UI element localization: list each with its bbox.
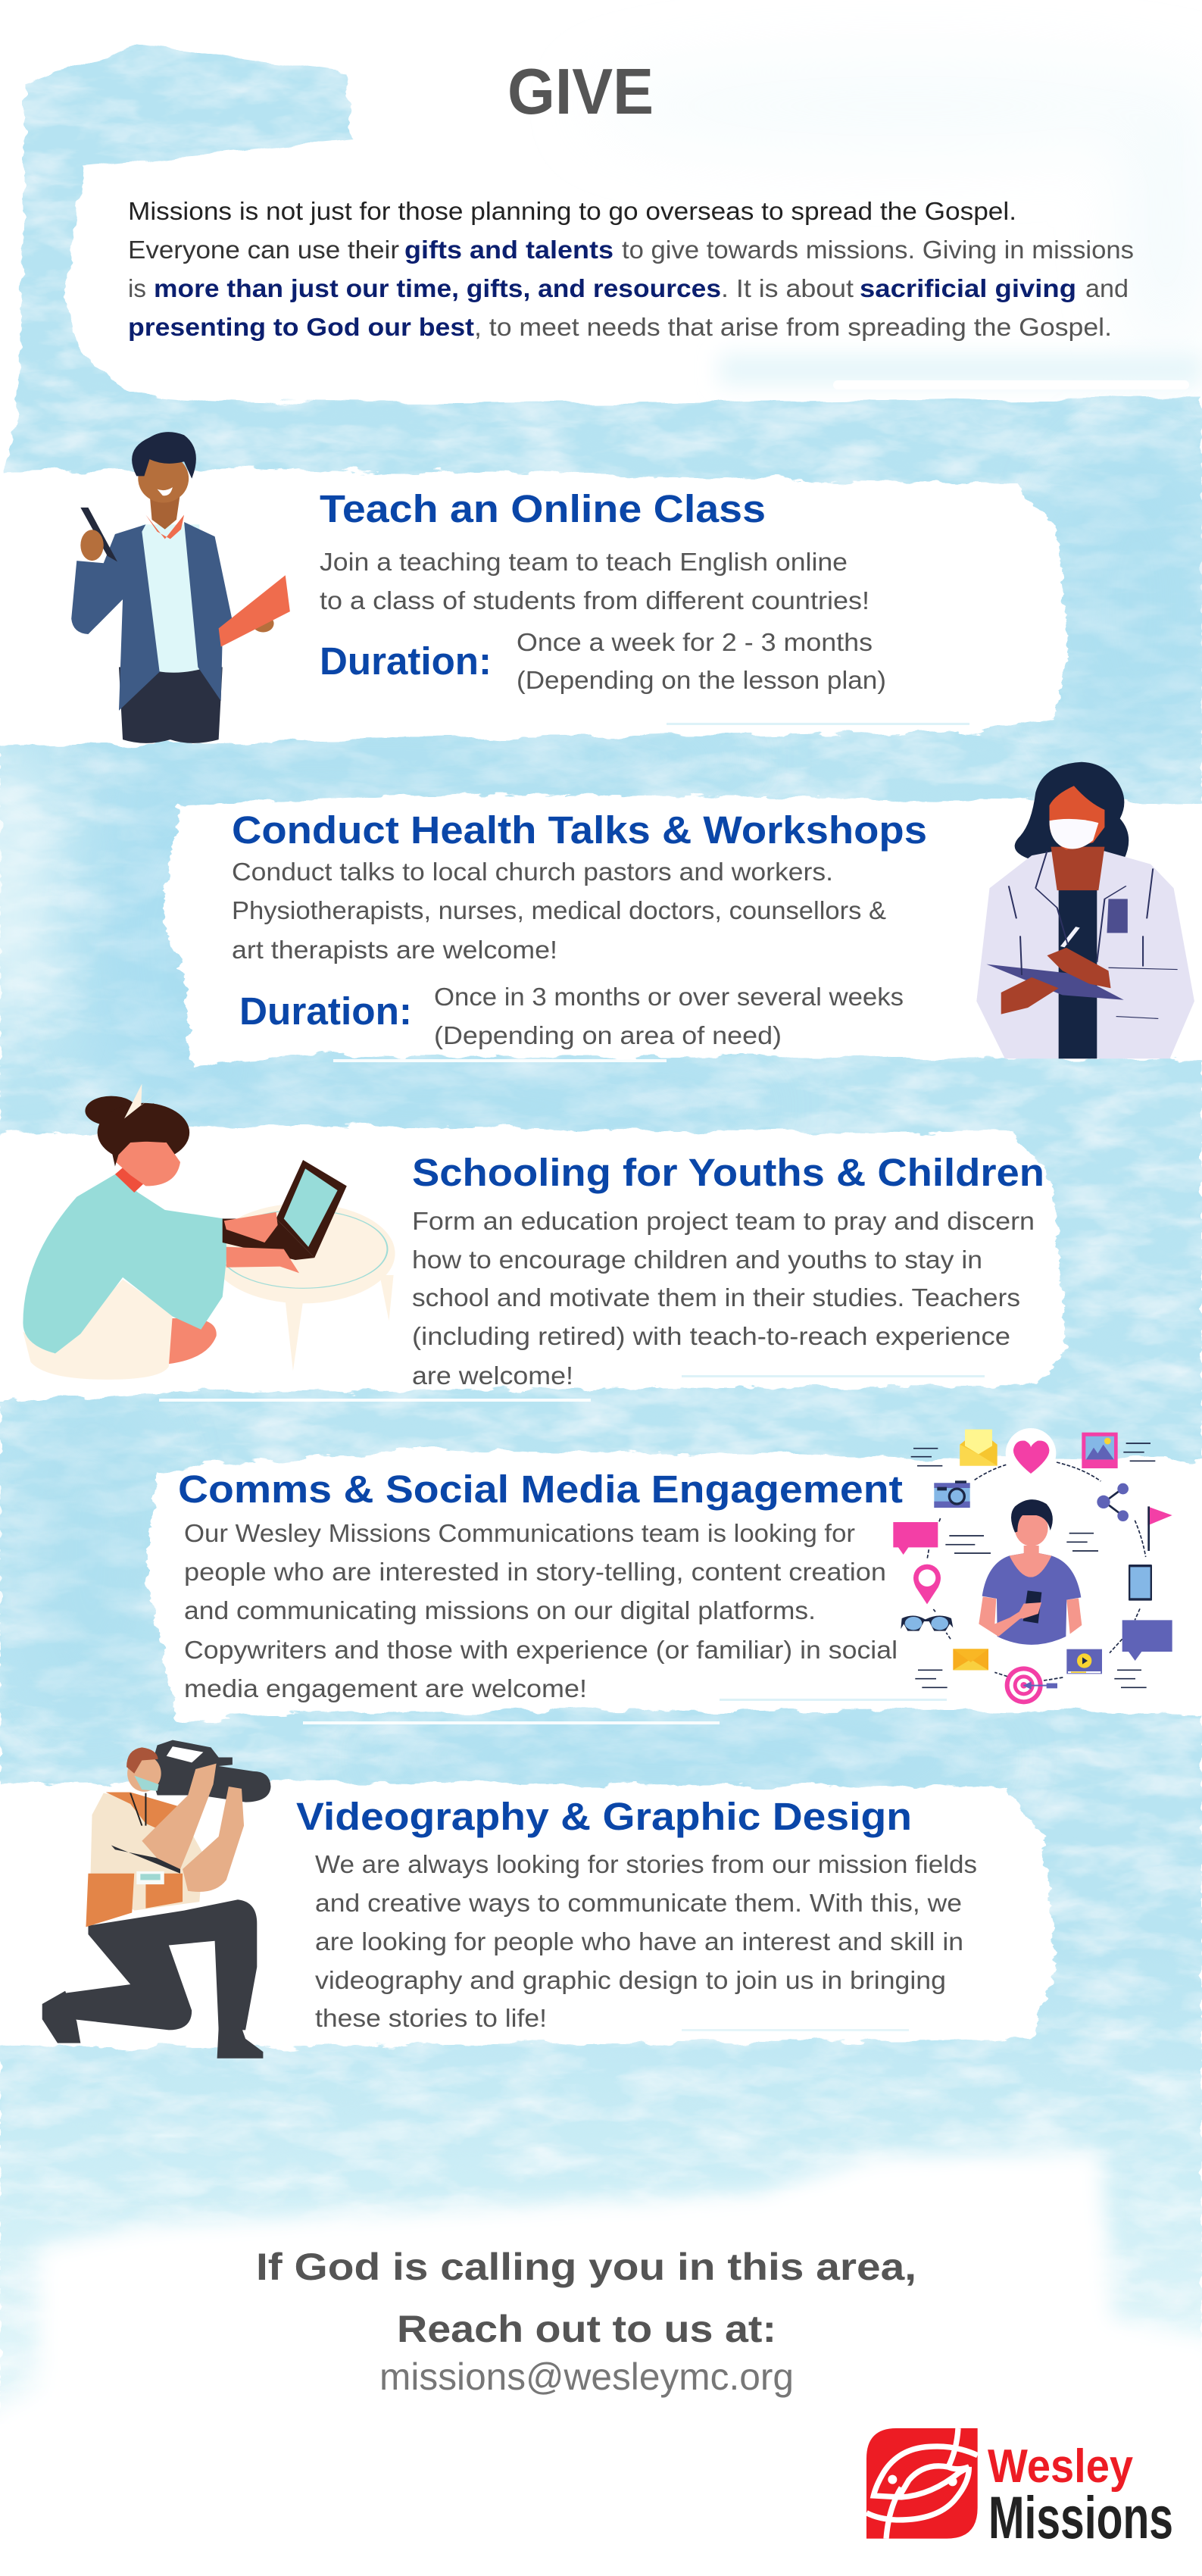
intro text block: to give towards missions. Giving in missions (622, 236, 1134, 264)
body: teach: to a class of students from different countries! (320, 586, 869, 614)
body: teach (320, 548, 869, 614)
duration: teach: (Depending on the lesson plan) (517, 666, 886, 694)
intro text block: more than just our time, gifts, and resources (154, 274, 721, 302)
title: GIVE (507, 56, 654, 128)
heading: teach: Teach an Online Class (320, 487, 766, 530)
bottom white fade area (0, 2150, 1202, 2576)
body: videography: these stories to life! (315, 2004, 547, 2032)
icon: social media network illustration (893, 1428, 1172, 1704)
panel: teach an online class (320, 487, 886, 694)
body: videography: are looking for people who have an interest and skill in (315, 1927, 963, 1955)
duration: health (239, 983, 904, 1049)
call to action (256, 2246, 916, 2398)
body: health (232, 858, 886, 964)
call to action: Reach out to us at: (397, 2308, 776, 2350)
logo mark (866, 2428, 978, 2539)
body: schooling: how to encourage children and youths to stay in (412, 1246, 982, 1274)
white brush panels (0, 468, 1202, 2047)
body: schooling: are welcome! (412, 1361, 573, 1390)
intro text block: gifts and talents (404, 236, 613, 264)
body: comms: people who are interested in story-telling, content creation (184, 1558, 886, 1586)
body: videography (315, 1850, 977, 2032)
duration: health: (Depending on area of need) (434, 1021, 782, 1049)
duration: health: Once in 3 months or over several weeks (434, 983, 904, 1011)
duration: teach: Duration: (320, 639, 492, 683)
body: comms: Copywriters and those with experience (or familiar) in social (184, 1636, 898, 1664)
call to action: If God is calling you in this area, (256, 2246, 916, 2288)
heading: health: Conduct Health Talks & Workshops (232, 808, 927, 852)
logo: Wesley Missions: Wesley (988, 2440, 1133, 2493)
intro text block: and (1085, 274, 1129, 302)
panel: schooling (412, 1151, 1044, 1390)
body: comms: and communicating missions on our digital platforms. (184, 1596, 816, 1624)
icon: teacher illustration (71, 432, 290, 743)
body: schooling (412, 1207, 1035, 1390)
intro text block: sacrificial giving (860, 274, 1076, 302)
duration: teach (320, 628, 886, 694)
intro text block: Missions is not just for those planning to go overseas to spread the Gospel. (128, 197, 1016, 225)
body: schooling: Form an education project team to pray and discern (412, 1207, 1035, 1235)
body: health: Conduct talks to local church pastors and workers. (232, 858, 833, 886)
body: health: Physiotherapists, nurses, medical doctors, counsellors & (232, 896, 886, 924)
body: teach: Join a teaching team to teach English online (320, 548, 848, 576)
intro text block: . It is about (721, 274, 854, 302)
body: videography: We are always looking for stories from our mission fields (315, 1850, 977, 1878)
body: comms (184, 1519, 898, 1702)
intro text block (128, 197, 1134, 341)
icon: cameraman illustration (42, 1740, 271, 2059)
duration: health: Duration: (239, 989, 412, 1033)
panel: comms and social media (178, 1468, 903, 1702)
heading: comms: Comms & Social Media Engagement (178, 1468, 903, 1511)
body: schooling: (including retired) with teach-to-reach experience (412, 1322, 1010, 1350)
body: comms: Our Wesley Missions Communications team is looking for (184, 1519, 855, 1547)
body: videography: and creative ways to communicate them. With this, we (315, 1889, 962, 1917)
duration: teach: Once a week for 2 - 3 months (517, 628, 873, 656)
icon: doctor illustration (976, 762, 1194, 1058)
intro text block: is (128, 274, 146, 302)
body: schooling: school and motivate them in their studies. Teachers (412, 1283, 1020, 1311)
email: missions@wesleymc.org (379, 2356, 794, 2398)
body: videography: videography and graphic design to join us in bringing (315, 1966, 946, 1994)
heading: videography: Videography & Graphic Design (296, 1795, 912, 1838)
panel: videography (296, 1795, 977, 2032)
intro text block: Everyone can use their (128, 236, 399, 264)
body: health: art therapists are welcome! (232, 936, 557, 964)
intro text block: presenting to God our best (128, 313, 474, 341)
body: comms: media engagement are welcome! (184, 1674, 587, 1702)
logo: Wesley Missions (866, 2428, 1173, 2551)
panel: conduct health talks (232, 808, 927, 1049)
icon: woman with laptop illustration (23, 1083, 395, 1380)
intro text block: , to meet needs that arise from spreading the Gospel. (474, 313, 1112, 341)
heading: schooling: Schooling for Youths & Children (412, 1151, 1044, 1194)
